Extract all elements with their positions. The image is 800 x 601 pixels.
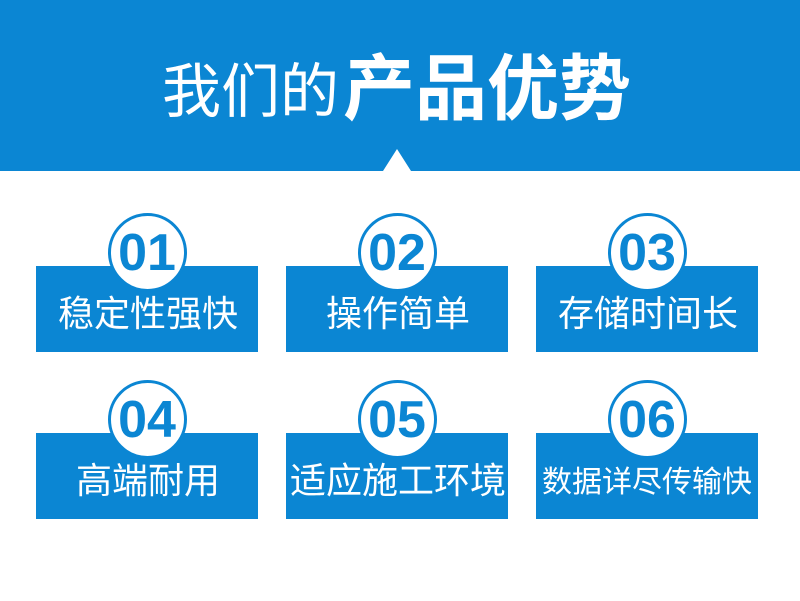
title: 产品优势 (343, 50, 631, 130)
panel: 02 easy operation (286, 266, 508, 352)
number badge 06: 06 (618, 391, 676, 449)
number badge 05: 05 (368, 391, 426, 449)
label: easy operation: 操作简单 (326, 293, 470, 334)
icon: white triangle pointer (383, 149, 411, 171)
label: site adaptability: 适应施工环境 (290, 460, 506, 501)
label: stability: 稳定性强快 (58, 293, 238, 334)
number badge 02 (358, 213, 436, 292)
number badge 03: 03 (618, 224, 676, 282)
label: long storage: 存储时间长 (558, 293, 738, 334)
number badge 04 (108, 380, 186, 459)
number badge 04: 04 (118, 391, 176, 449)
number badge 05 (358, 380, 436, 459)
header banner (0, 0, 800, 171)
panel: 06 fast data transfer (536, 433, 758, 519)
panel: 01 stability (36, 266, 258, 352)
number badge 06 (608, 380, 686, 459)
number badge 02: 02 (368, 224, 426, 282)
number badge 03 (608, 213, 686, 292)
panel: 04 high-end durability (36, 433, 258, 519)
panel: 03 long storage (536, 266, 758, 352)
number badge 01: 01 (118, 224, 176, 282)
label: high-end durability: 高端耐用 (76, 460, 220, 501)
panel: 05 site adaptability (286, 433, 508, 519)
title: 我们的 (162, 59, 339, 125)
number badge 01 (108, 213, 186, 292)
title (162, 50, 631, 130)
label: fast data transfer: 数据详尽传输快 (542, 466, 752, 499)
